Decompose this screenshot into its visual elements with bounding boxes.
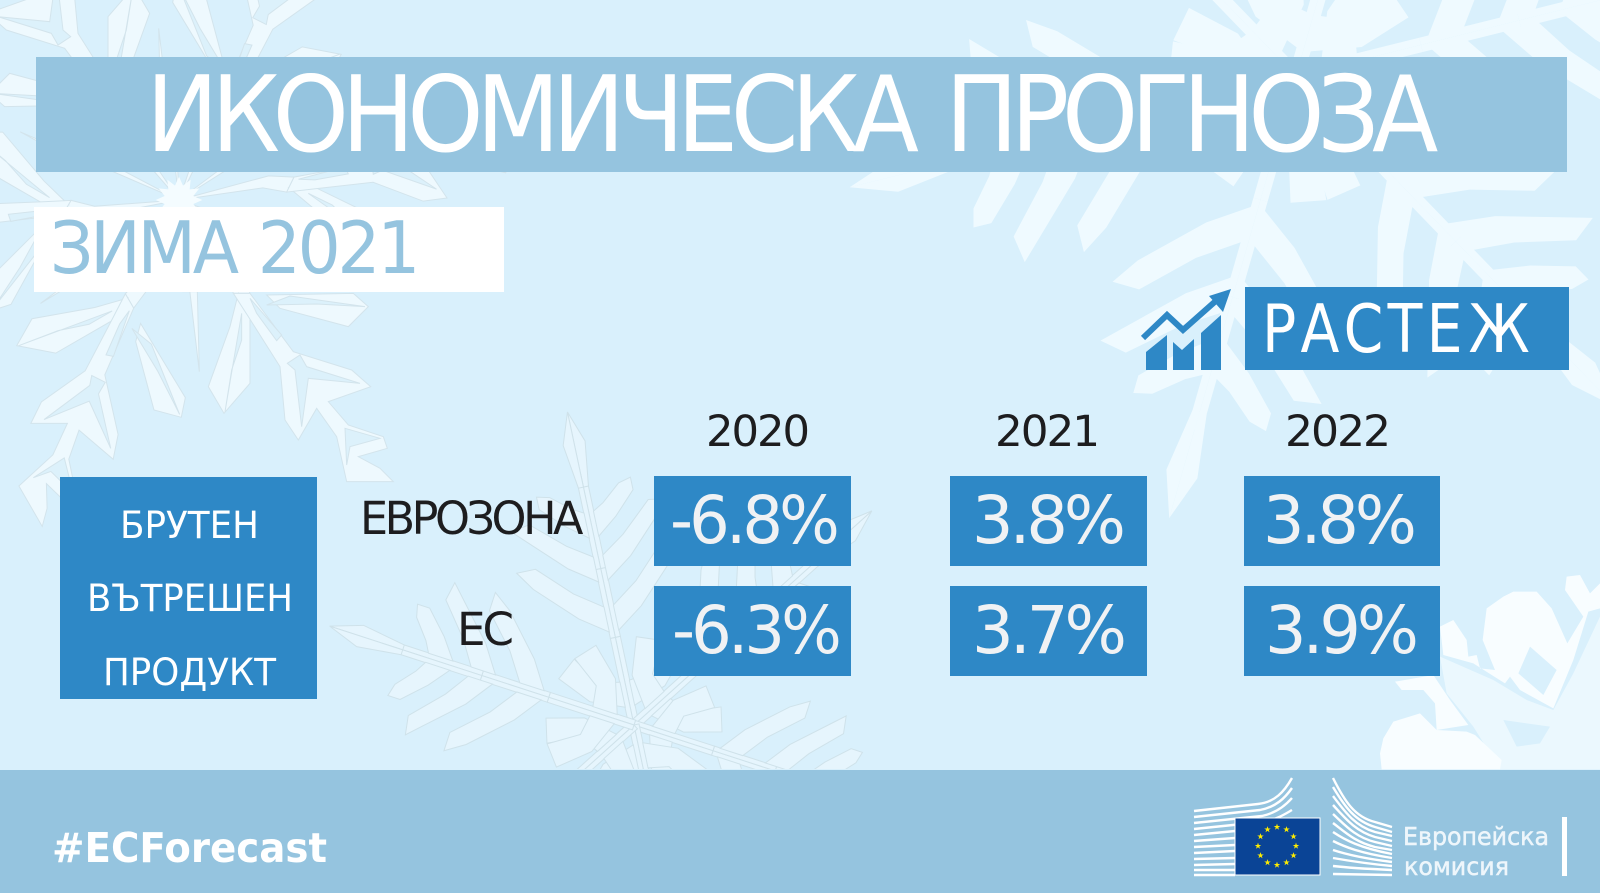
snowflake: top right <box>850 0 1600 518</box>
snowflake: bottom right <box>1380 575 1600 769</box>
logo: European Commission <box>1194 778 1567 881</box>
year header: 2022: 2022 <box>1285 407 1389 457</box>
row label: EU: ЕС <box>457 603 512 656</box>
value: EU 2021: 3.7% <box>972 592 1124 669</box>
snowflake: top left <box>0 0 506 528</box>
hashtag: #ECForecast <box>52 824 327 872</box>
panel: GDP label <box>60 477 317 699</box>
logo: wordmark: комисия <box>1404 852 1509 881</box>
logo: EU flag <box>1235 818 1320 875</box>
panel: GDP label: БРУТЕН <box>120 504 259 547</box>
value: euro area 2021 <box>950 476 1147 566</box>
panel: GDP label: ВЪТРЕШЕН <box>87 577 293 620</box>
logo: wordmark: Европейска <box>1403 822 1549 851</box>
panel: GDP label: ПРОДУКТ <box>103 651 276 694</box>
value: euro area 2021: 3.8% <box>972 482 1123 559</box>
title banner: ИКОНОМИЧЕСКА ПРОГНОЗА <box>146 54 1438 176</box>
value: EU 2022 <box>1244 586 1440 676</box>
value: EU 2022: 3.9% <box>1265 592 1416 669</box>
subtitle: season: ЗИМА 2021 <box>50 206 417 290</box>
logo: wordmark <box>1403 822 1549 881</box>
value: EU 2020: -6.3% <box>672 592 839 669</box>
value: EU 2021 <box>950 586 1147 676</box>
icon: growth chart <box>1143 289 1231 370</box>
footer band <box>0 770 1600 893</box>
value: euro area 2022 <box>1244 476 1440 566</box>
value: euro area 2020: -6.8% <box>670 482 837 559</box>
snowflake: bottom centre <box>330 412 872 769</box>
logo: left building <box>1194 778 1292 875</box>
year header: 2021: 2021 <box>995 407 1098 457</box>
heading: growth: РАСТЕЖ <box>1262 290 1534 368</box>
value: euro area 2022: 3.8% <box>1263 482 1414 559</box>
logo: right building <box>1333 778 1392 875</box>
row label: euro area: ЕВРОЗОНА <box>360 492 584 545</box>
year header: 2020: 2020 <box>706 407 808 457</box>
